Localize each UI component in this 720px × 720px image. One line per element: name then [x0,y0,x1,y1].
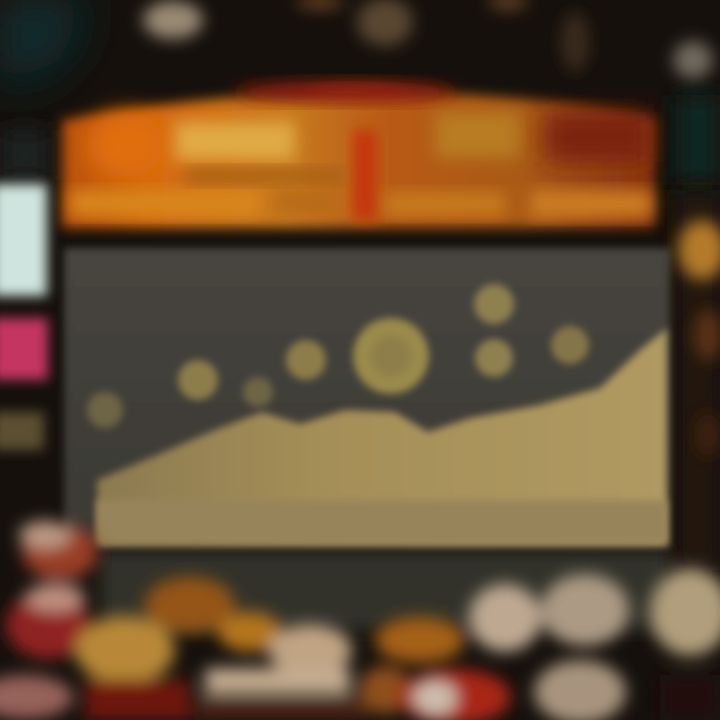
top background lights [143,0,713,79]
foreground food objects [0,521,720,720]
chart: rising area [97,328,667,545]
baseline strip [97,500,667,544]
chart markers [87,284,589,428]
right side warm objects [678,220,720,457]
pink screen [0,318,48,380]
white screen [0,184,47,296]
tan screen [0,412,44,450]
panel: chart board [64,248,670,548]
left screens [0,184,48,450]
banner: orange header band [62,81,655,228]
